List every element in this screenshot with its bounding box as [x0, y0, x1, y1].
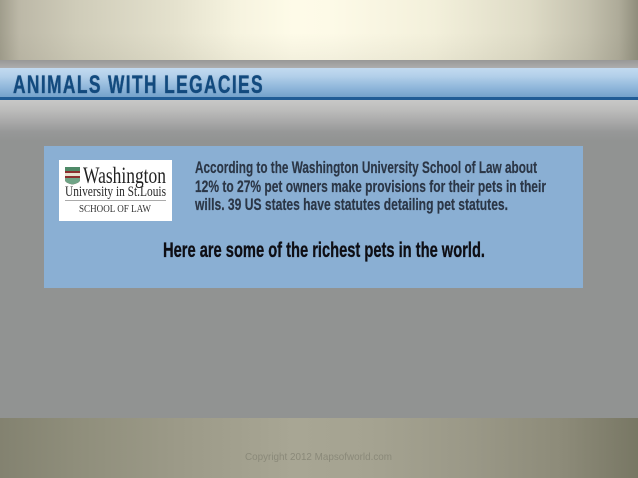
grey strip above title	[0, 60, 638, 68]
icon: shield	[65, 167, 80, 184]
intro paragraph: wills. 39 US states have statutes detailing pet statutes.	[194, 195, 508, 214]
logo rule	[65, 200, 166, 201]
highlighted statement: Here are some of the richest pets in the world.	[163, 239, 485, 262]
intro paragraph	[194, 158, 546, 214]
title: ANIMALS WITH LEGACIES	[13, 71, 264, 99]
top cream band	[0, 0, 638, 60]
title bar	[0, 68, 638, 100]
logo school line: SCHOOL OF LAW	[79, 204, 151, 215]
copyright footer: Copyright 2012 Mapsofworld.com	[245, 451, 392, 463]
info panel	[44, 146, 583, 288]
logo: Washington University School of Law	[59, 160, 172, 221]
grey body background	[0, 100, 638, 418]
bottom khaki band	[0, 418, 638, 478]
